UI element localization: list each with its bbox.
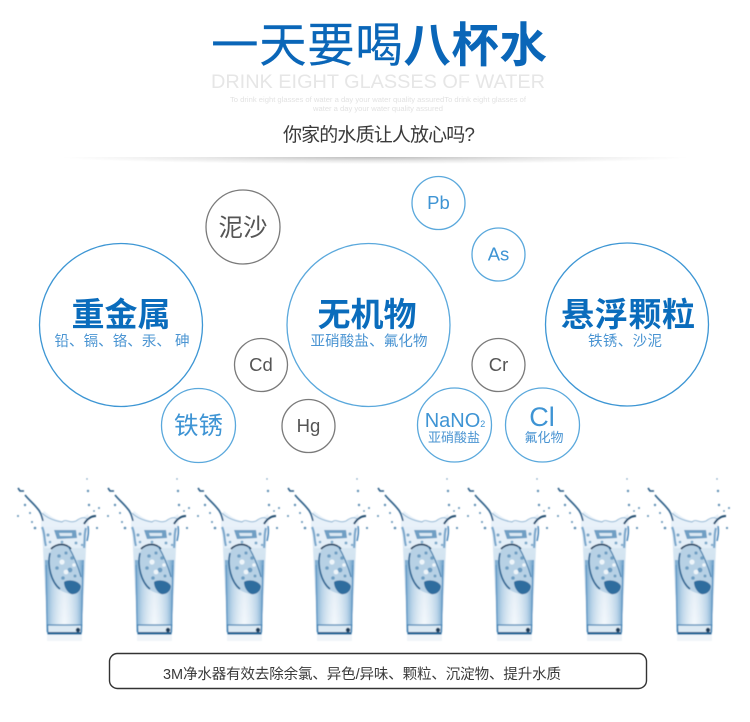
circle: Hg (282, 400, 335, 452)
circle: inorganics (287, 244, 450, 406)
circle: heavy metals: 铅、镉、铬、汞、 砷 (54, 333, 190, 350)
question heading: 你家的水质让人放心吗? (283, 124, 475, 146)
english description: To drink eight glasses of water a day your water quality assuredTo drink eight glasses of (230, 95, 527, 104)
title: 一天要喝八杯水 (211, 20, 547, 73)
glass 1 (17, 478, 100, 641)
glass 5 (377, 478, 460, 641)
circle: As: As (488, 244, 509, 264)
glass 3 (197, 478, 280, 641)
circle: Hg: Hg (297, 415, 320, 436)
circle: rust: 铁锈 (174, 412, 223, 440)
glass 7 (557, 478, 640, 641)
bottom callout: 3M净水器有效去除余氯、异色/异味、颗粒、沉淀物、提升水质 (163, 665, 561, 683)
circle: silt: 泥沙 (218, 214, 268, 242)
circle: Cl: Cl (529, 402, 555, 432)
circle: NaNO2: 亚硝酸盐 (428, 430, 480, 445)
circle: Cd (234, 338, 288, 392)
circle: suspended particles: 悬浮颗粒 (561, 296, 695, 333)
glass 6 (467, 478, 550, 641)
circle: NaNO2 (418, 388, 492, 462)
circle: Pb: Pb (427, 192, 450, 213)
english subtitle: DRINK EIGHT GLASSES OF WATER (211, 71, 545, 93)
circle: suspended particles: 铁锈、沙泥 (588, 333, 662, 350)
row of eight water glasses (17, 478, 730, 641)
header shadow (60, 157, 690, 171)
english description: water a day your water quality assured (312, 104, 443, 113)
circle: Cr (472, 338, 525, 392)
glass 4 (287, 478, 370, 641)
circle: heavy metals (40, 244, 202, 406)
circle: suspended particles (546, 243, 708, 406)
circle: Cd: Cd (249, 354, 273, 375)
circle: As (472, 228, 525, 281)
circle: inorganics: 无机物 (318, 296, 416, 333)
circle: rust (162, 388, 236, 462)
circle: Cr: Cr (489, 354, 508, 375)
circle: heavy metals: 重金属 (72, 296, 170, 333)
circle: NaNO2: NaNO2 (425, 410, 485, 432)
circle: Cl: 氟化物 (524, 430, 564, 445)
circle: inorganics: 亚硝酸盐、氟化物 (310, 333, 428, 350)
english description (230, 95, 527, 113)
glass 2 (107, 478, 190, 641)
circle: silt (206, 190, 280, 264)
glass 8 (647, 478, 730, 641)
circle: Pb (412, 176, 465, 230)
bottom callout (110, 654, 646, 688)
circle: Cl (506, 388, 580, 462)
